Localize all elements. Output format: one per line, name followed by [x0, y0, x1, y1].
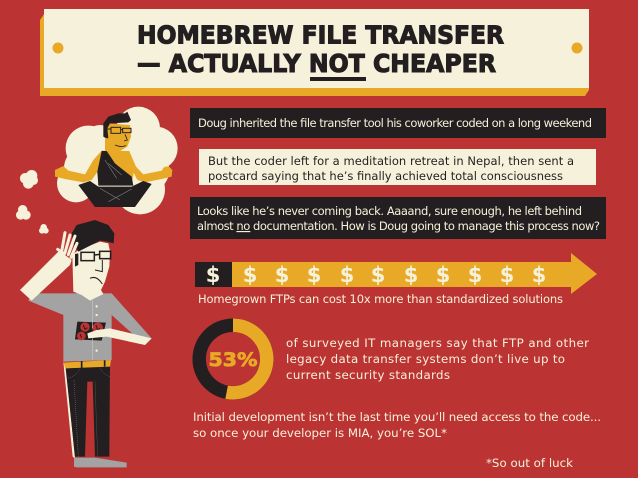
closing text: so once your developer is MIA, you’re SOL* [193, 426, 447, 440]
cost arrow with dollar signs: $ [371, 263, 385, 287]
meditating figure [55, 112, 172, 207]
tablet [75, 322, 106, 341]
cost arrow with dollar signs: $ [340, 263, 354, 287]
arrow caption: Homegrown FTPs can cost 10x more than standardized solutions [198, 292, 563, 306]
survey statistic text [286, 336, 589, 382]
footnote: *So out of luck [486, 456, 573, 470]
title banner: HOMEBREW FILE TRANSFER [137, 20, 504, 50]
survey statistic text: current security standards [286, 368, 450, 382]
cost arrow with dollar signs: $ [275, 263, 289, 287]
cost arrow with dollar signs: $ [436, 263, 450, 287]
cost arrow with dollar signs: $ [532, 263, 546, 287]
cost arrow with dollar signs: $ [307, 263, 321, 287]
text box: meditation retreat: But the coder left for a meditation retreat in Nepal, then sent a [208, 154, 574, 168]
survey statistic text: legacy data transfer systems don’t live up to [286, 352, 565, 366]
title banner: — ACTUALLY NOT CHEAPER [137, 49, 496, 78]
cost arrow with dollar signs: $ [243, 263, 257, 287]
standing man body [28, 293, 152, 467]
closing text: Initial development isn’t the last time you’ll need access to the code... [193, 410, 601, 424]
closing text [193, 410, 601, 440]
text box: Doug inherited [190, 108, 606, 138]
cost arrow with dollar signs: $ [500, 263, 514, 287]
donut chart 53%: 53% [208, 349, 258, 371]
text box: meditation retreat: postcard saying that he’s finally achieved total consciousness [208, 169, 563, 183]
survey statistic text: of surveyed IT managers say that FTP and other [286, 336, 589, 350]
title banner [40, 9, 589, 96]
cost arrow with dollar signs: $ [404, 263, 418, 287]
text box: meditation retreat [199, 149, 596, 185]
cloud [57, 107, 178, 214]
worried head with raised arm [20, 220, 114, 301]
cost arrow with dollar signs: $ [206, 263, 220, 287]
small thought puffs [16, 170, 49, 234]
text box: Doug inherited: Doug inherited the file transfer tool his coworker coded on a long weekend [198, 116, 592, 130]
text box: never coming back [190, 197, 606, 239]
donut chart 53% [199, 325, 267, 393]
cost arrow with dollar signs [195, 253, 597, 294]
cost arrow with dollar signs: $ [468, 263, 482, 287]
text box: never coming back: Looks like he’s never coming back. Aaaand, sure enough, he left behind [197, 204, 582, 218]
thought cloud with meditating coder [55, 107, 178, 214]
text box: never coming back: almost no documentation. How is Doug going to manage this process now? [197, 219, 600, 233]
